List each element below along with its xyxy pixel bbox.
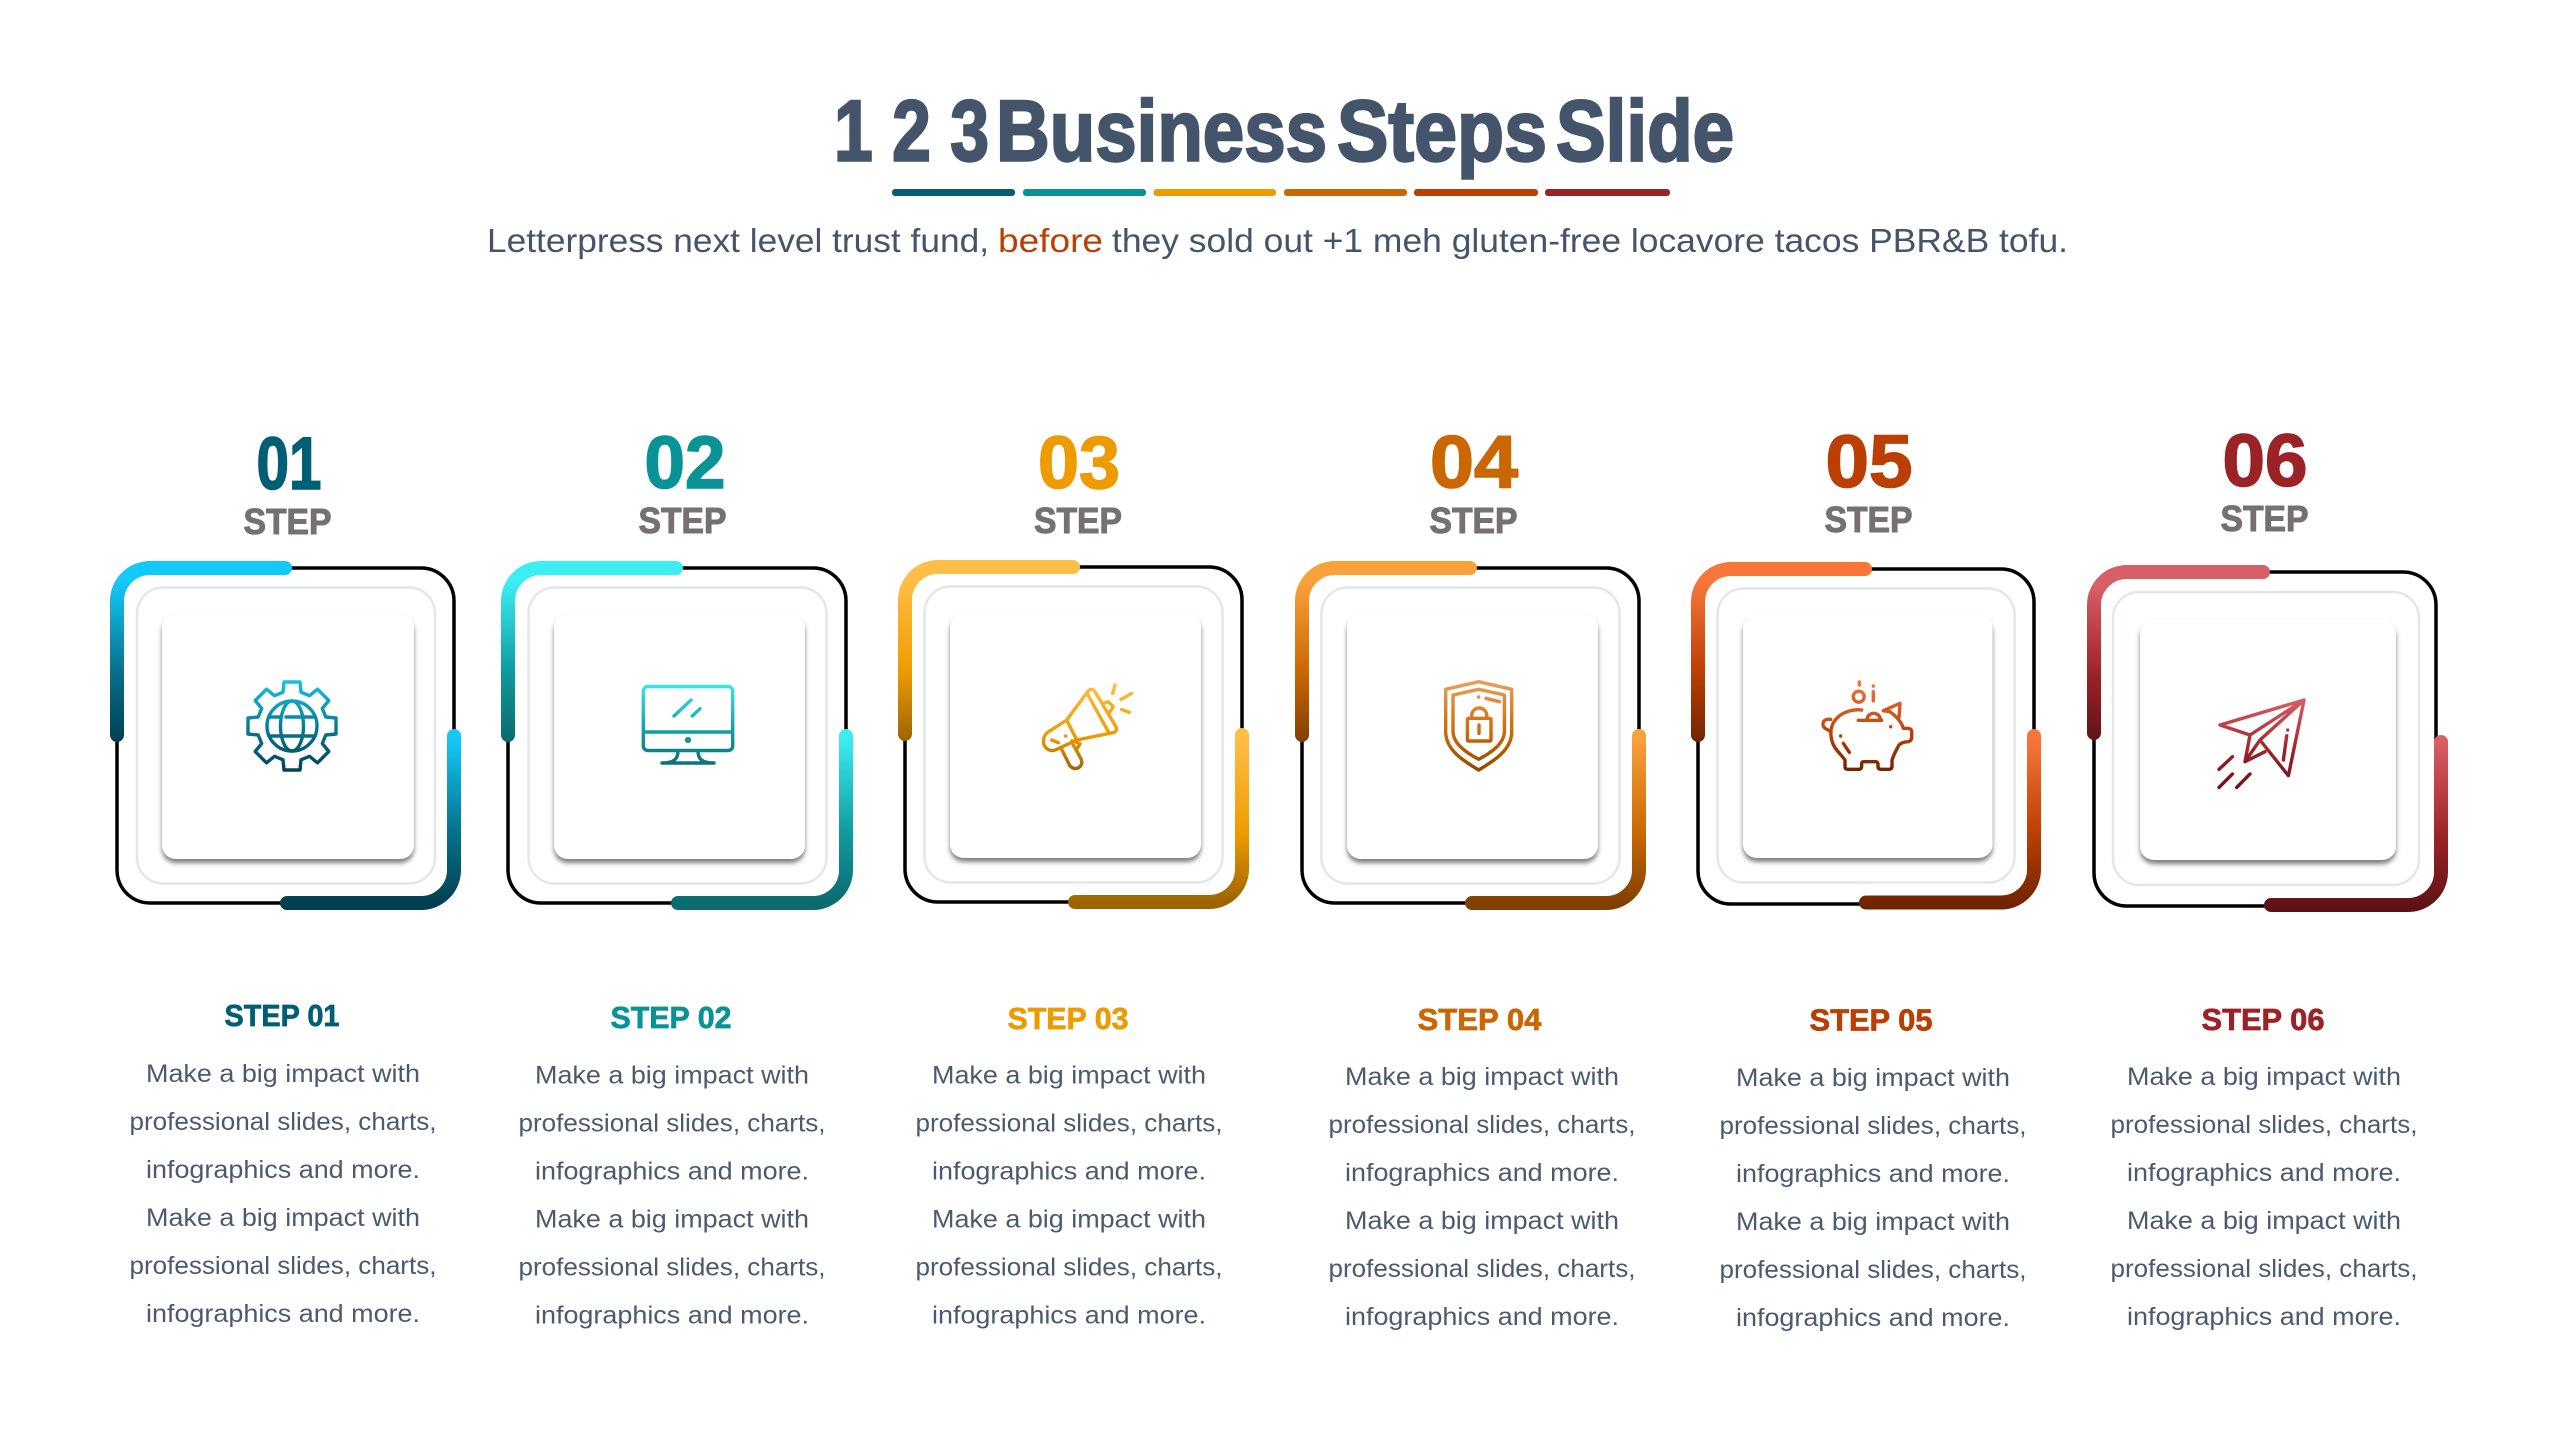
step body text: professional slides, charts, <box>518 1110 826 1138</box>
step body text: infographics and more. <box>932 1302 1206 1330</box>
step body text: Make a big impact with <box>1736 1064 2010 1092</box>
column: step 04 <box>1302 420 1639 1331</box>
step body text: Make a big impact with <box>932 1062 1206 1090</box>
column: step 01 <box>117 422 454 1328</box>
step number 03: 03 <box>1038 421 1120 504</box>
step body text: infographics and more. <box>146 1156 420 1184</box>
step body text: Make a big impact with <box>1345 1207 1619 1235</box>
subtitle: Letterpress next level trust fund, <box>487 222 989 259</box>
step body text: professional slides, charts, <box>1720 1256 2026 1284</box>
step body text: infographics and more. <box>535 1302 809 1330</box>
step body text <box>518 1062 826 1330</box>
step heading: STEP 01 <box>224 998 340 1033</box>
step body text: professional slides, charts, <box>916 1254 1222 1282</box>
step body text <box>916 1062 1222 1330</box>
subtitle <box>487 222 2068 259</box>
step body text <box>1328 1063 1636 1331</box>
step body text: professional slides, charts, <box>1328 1255 1636 1283</box>
step body text: infographics and more. <box>2127 1303 2401 1331</box>
column: step 02 <box>508 421 846 1330</box>
step body text: Make a big impact with <box>2127 1063 2401 1091</box>
icon: piggy bank <box>1823 682 1912 769</box>
step body text: Make a big impact with <box>146 1060 420 1088</box>
step body text: Make a big impact with <box>932 1206 1206 1234</box>
step body text: infographics and more. <box>1345 1159 1619 1187</box>
step body text: infographics and more. <box>1736 1160 2010 1188</box>
step body text: professional slides, charts, <box>130 1252 436 1280</box>
step heading: STEP 02 <box>610 1000 732 1035</box>
icon: megaphone <box>1043 685 1132 769</box>
step heading: STEP 04 <box>1418 1002 1542 1037</box>
step body text: infographics and more. <box>1345 1303 1619 1331</box>
step heading: STEP 06 <box>2202 1002 2324 1037</box>
step label: STEP <box>1824 499 1912 540</box>
step number 06: 06 <box>2222 419 2308 502</box>
step body text: Make a big impact with <box>535 1206 809 1234</box>
card frame <box>1698 569 2034 904</box>
column: step 06 <box>2094 419 2441 1331</box>
icon: shield with lock <box>1446 682 1512 770</box>
step number 04: 04 <box>1430 420 1518 504</box>
step heading: STEP 05 <box>1810 1002 1932 1038</box>
step body text: infographics and more. <box>932 1158 1206 1186</box>
step label: STEP <box>1034 500 1122 541</box>
icon: paper plane <box>2219 700 2304 787</box>
step label: STEP <box>638 500 726 541</box>
column: step 05 <box>1698 420 2034 1332</box>
step heading: STEP 03 <box>1008 1001 1128 1036</box>
card frame <box>2094 572 2441 906</box>
step number 01: 01 <box>256 422 322 505</box>
subtitle: they sold out +1 meh gluten-free locavore tacos PBR&B tofu. <box>1112 222 2068 259</box>
title underline colour bars <box>892 189 1670 196</box>
step body text: professional slides, charts, <box>2110 1255 2418 1283</box>
title <box>834 84 1734 180</box>
step body text: professional slides, charts, <box>1328 1111 1636 1139</box>
card frame <box>905 567 1242 902</box>
step label: STEP <box>244 501 332 542</box>
step body text <box>1720 1064 2026 1332</box>
step body text: Make a big impact with <box>1736 1208 2010 1236</box>
step body text: professional slides, charts, <box>518 1254 826 1282</box>
step body text: Make a big impact with <box>146 1204 420 1232</box>
step body text: infographics and more. <box>1736 1304 2010 1332</box>
subtitle: before <box>998 222 1103 259</box>
icon: gear globe <box>248 682 336 770</box>
step body text: professional slides, charts, <box>1720 1112 2026 1140</box>
step number 05: 05 <box>1826 420 1912 503</box>
title: Business <box>996 84 1327 180</box>
title: 1 2 3 <box>834 84 989 180</box>
column: step 03 <box>905 421 1242 1330</box>
step body text: Make a big impact with <box>535 1062 809 1090</box>
icon: desktop monitor <box>643 686 733 763</box>
card frame <box>1302 568 1639 903</box>
step body text: infographics and more. <box>2127 1159 2401 1187</box>
step body text: professional slides, charts, <box>2110 1111 2418 1139</box>
step body text <box>130 1060 436 1328</box>
step body text: professional slides, charts, <box>130 1108 436 1136</box>
title: Slide <box>1556 84 1734 180</box>
step body text <box>2110 1063 2418 1331</box>
step body text: professional slides, charts, <box>916 1110 1222 1138</box>
card frame <box>508 568 846 903</box>
step body text: infographics and more. <box>146 1300 420 1328</box>
step body text: infographics and more. <box>535 1158 809 1186</box>
step label: STEP <box>2220 498 2308 539</box>
step number 02: 02 <box>644 421 726 504</box>
step label: STEP <box>1430 500 1518 541</box>
title: Steps <box>1337 84 1547 180</box>
card frame <box>117 568 454 903</box>
step body text: Make a big impact with <box>1345 1063 1619 1091</box>
step body text: Make a big impact with <box>2127 1207 2401 1235</box>
